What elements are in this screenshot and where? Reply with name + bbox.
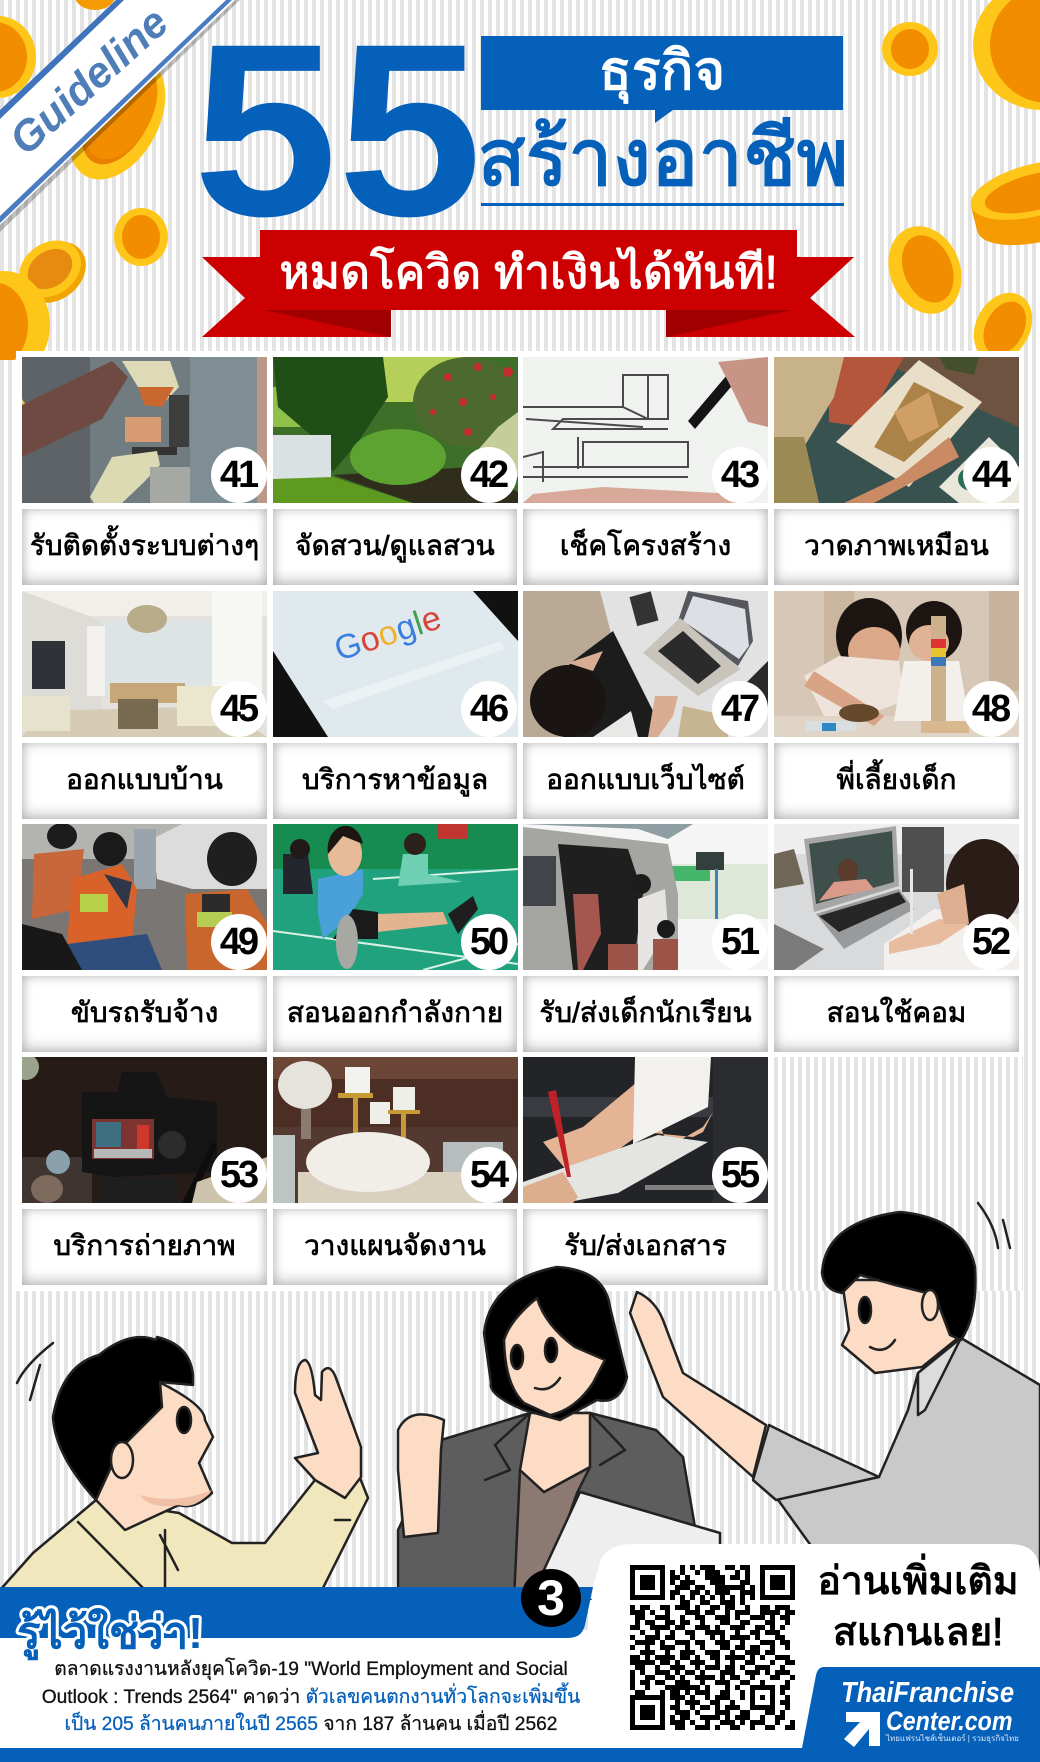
badge 42: 42 [470,454,506,496]
photo: garden [273,357,518,503]
badge 48 [963,681,1019,737]
badge 43: 43 [721,454,757,496]
label 45 [22,743,267,819]
stripes in empty grid slot [774,1057,1023,1291]
badge 44: 44 [972,454,1008,496]
label 49: ขับรถรับจ้าง [71,997,218,1028]
photo: installing [22,357,267,503]
photo: living room [22,591,267,737]
blue fact header band [0,1587,593,1638]
badge 51 [712,914,768,970]
service 52 [774,824,1019,1052]
illustration: three colleagues high-fiving [1,1202,1040,1600]
label 48: พี่เลี้ยงเด็ก [836,764,956,795]
logo tagline: ไทยแฟรนไชส์เซ็นเตอร์ | รวมธุรกิจไทย [886,1734,1019,1743]
photo: document signing [523,1057,768,1203]
badge 41 [211,447,267,503]
QR code [630,1565,795,1730]
badge 55: 55 [721,1154,757,1196]
service 48 [774,591,1019,819]
badge 45 [211,681,267,737]
label 41 [22,509,267,585]
white grid panel [16,351,1023,1291]
label 55 [523,1209,768,1285]
blue title box [481,36,843,123]
service 47 [523,591,768,819]
service 45 [22,591,267,819]
badge 52 [963,914,1019,970]
label 42 [273,509,517,585]
label 49 [22,976,267,1052]
black number badge: 3 [537,1570,565,1626]
call to action text [805,1556,1031,1666]
label 46 [273,743,517,819]
service 41 [22,357,267,585]
photo: school van [523,824,768,970]
call to action text: อ่านเพิ่มเติม [817,1560,1019,1603]
photo: online teaching [774,824,1019,970]
label 52 [774,976,1019,1052]
label 46: บริการหาข้อมูล [302,764,488,795]
badge 53 [211,1147,267,1203]
label 41: รับติดตั้งระบบต่างๆ [30,530,259,561]
service 44 [774,357,1019,585]
badge 46: 46 [470,688,506,730]
photo: childcare [774,591,1019,737]
badge 47 [712,681,768,737]
badge 51: 51 [721,921,757,963]
badge 47: 47 [721,688,757,730]
photo: motorbike taxis [22,824,267,970]
QR call-to-action panel [592,1544,1040,1748]
title block [193,30,849,230]
label 42: จัดสวน/ดูแลสวน [295,530,495,561]
guideline corner banner [0,0,240,232]
service 42 [273,357,518,585]
label 51: รับ/ส่งเด็กนักเรียน [539,997,752,1028]
photo: exercise [273,824,518,970]
ribbon text: หมดโควิด ทำเงินได้ทันที! [279,246,778,298]
person: right man [630,1203,1040,1600]
white fact area [0,1630,620,1750]
bottom blue bar [0,1748,1040,1762]
title underline [481,203,844,206]
black number badge [521,1569,581,1627]
badge 41: 41 [220,454,256,496]
service 54 [273,1057,518,1285]
badge 55 [712,1147,768,1203]
service 51 [523,824,768,1052]
badge 42 [461,447,517,503]
label 47 [523,743,768,819]
photo: sketch [523,357,768,503]
badge 53: 53 [220,1154,256,1196]
red ribbon [202,230,855,337]
call to action text: สแกนเลย! [833,1611,1003,1654]
photo: portrait painting [774,357,1019,503]
service 50 [273,824,518,1052]
logo: ThaiFranchise Center [802,1667,1040,1748]
service 46 [273,591,518,819]
label 53 [22,1209,267,1285]
badge 49 [211,914,267,970]
service 55 [523,1057,768,1285]
service 53 [22,1057,267,1285]
title word 2: สร้างอาชีพ [477,113,849,202]
badge 54: 54 [470,1154,506,1196]
banner label: Guideline [1,0,178,164]
label 51 [523,976,768,1052]
badge 54 [461,1147,517,1203]
photo: search engine: Google [330,599,446,669]
label 44: วาดภาพเหมือน [804,530,989,561]
label 43 [523,509,768,585]
fact text: Outlook : Trends 2564" คาดว่า ตัวเลขคนตกงานทั่วโลกจะเพิ่มขึ้น [42,1686,580,1708]
label 55: รับ/ส่งเอกสาร [564,1230,727,1261]
logo name line 2: Center.com [886,1706,1012,1736]
label 54 [273,1209,517,1285]
fact text: เป็น 205 ล้านคนภายในปี 2565 จาก 187 ล้านคน เมื่อปี 2562 [64,1714,557,1735]
logo name line 1: ThaiFranchise [841,1677,1014,1709]
photo: laptop on desk [523,591,768,737]
service 49 [22,824,267,1052]
photo: event table [273,1057,518,1203]
badge 46 [461,681,517,737]
badge 43 [712,447,768,503]
title word 1: ธุรกิจ [599,41,725,101]
person: woman [398,1267,720,1600]
label 50: สอนออกกำลังกาย [287,997,503,1028]
label 52: สอนใช้คอม [827,997,966,1028]
photo: camera [22,1057,267,1203]
label 45: ออกแบบบ้าน [66,764,223,795]
fact text: ตลาดแรงงานหลังยุคโควิด-19 "World Employment and Social [54,1659,568,1680]
label 48 [774,743,1019,819]
badge 50 [461,914,517,970]
badge 45: 45 [220,688,256,730]
fact heading: รู้ไว้ใช่ว่า! [17,1607,203,1660]
photo: search engine [273,591,518,737]
badge 52: 52 [972,921,1008,963]
label 44 [774,509,1019,585]
badge 48: 48 [972,688,1008,730]
label 43: เช็คโครงสร้าง [560,530,731,561]
label 50 [273,976,517,1052]
badge 49: 49 [220,921,256,963]
service 43 [523,357,768,585]
label 54: วางแผนจัดงาน [304,1230,486,1261]
fact text [20,1656,602,1742]
coins [0,0,1040,360]
logo arrow [844,1712,880,1747]
badge 50: 50 [470,921,506,963]
badge 44 [963,447,1019,503]
label 47: ออกแบบเว็บไซต์ [546,764,745,795]
person: left man [0,1337,368,1590]
label 53: บริการถ่ายภาพ [53,1230,236,1261]
